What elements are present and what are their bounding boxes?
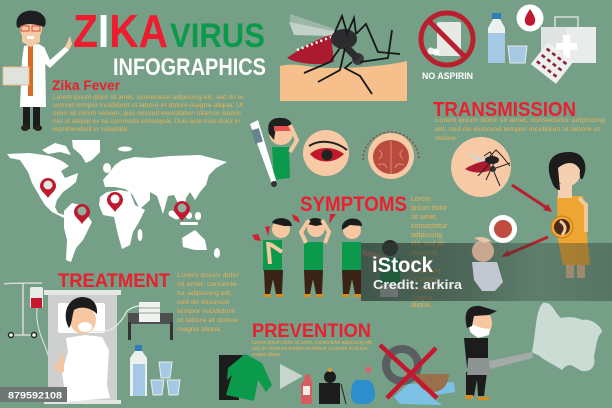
title: Zika Virus: VIRUS — [170, 17, 265, 55]
illustration: doctor — [3, 11, 72, 131]
icon: water bottle — [488, 13, 505, 63]
arrow: prevention items — [280, 364, 303, 389]
text block: Zika Fever: Lorem ipsum dolor sit amet, consectetur adipiscing elit, sed do ei- — [53, 94, 245, 101]
heading: Prevention: PREVENTION — [252, 320, 371, 342]
heading: Transmission: TRANSMISSION — [433, 99, 576, 121]
text block: Zika Fever: nisi ut aliquip ex ea commodo consequat. Duis aute irure dolor in — [53, 118, 240, 125]
icon: long pants and shirt — [219, 354, 272, 401]
illustration: symptom figures — [252, 214, 362, 297]
text block: Symptoms: Lorem — [411, 196, 431, 203]
text block: Prevention: Lorem ipsum dolor sit amet, consectetur adipiscing elit, — [252, 340, 373, 346]
text block: Symptoms: consectetur — [411, 223, 448, 230]
illustration: IV drip — [4, 283, 60, 358]
text block: Symptoms: elit, sed do — [411, 241, 445, 248]
text block: Treatment: sit amet, consecte- — [177, 281, 239, 288]
illustration: patient in bed — [44, 290, 140, 404]
icon: first aid kit — [541, 17, 596, 63]
text block: Transmission: dolore — [435, 135, 457, 142]
illustration: fog cloud — [532, 303, 602, 371]
text block: Treatment: tur adipiscing elit, — [177, 290, 232, 297]
illustration: man with fever — [268, 118, 297, 180]
text block: Treatment: tempor incididunt — [177, 308, 235, 315]
text block: Treatment: Lorem ipsum dolor — [177, 272, 240, 279]
text block: Transmission: Lorem ipsum dolor sit amet, consectetur adipiscing — [435, 117, 606, 124]
icon: trash bin — [319, 368, 346, 404]
arrow: mosquito to mother — [512, 185, 552, 212]
illustration: baby — [472, 237, 503, 291]
text block: Symptoms: incididunt — [411, 268, 441, 275]
text block: Symptoms: adipiscing — [411, 232, 442, 239]
icon: pill blister — [531, 42, 573, 84]
title: Zika Virus: ZIKA — [73, 5, 168, 57]
text block: Symptoms: magna — [411, 295, 433, 302]
text block: Transmission: elit, sed do eiusmod tempor incididunt ut labore et — [435, 126, 600, 133]
text block: Symptoms: ipsum dolor — [411, 205, 448, 212]
text block: Symptoms: aliqua. — [411, 302, 432, 309]
illustration: fourth symptom figure — [362, 240, 400, 297]
text block: Symptoms: ut labore — [411, 277, 438, 284]
text block: Symptoms: et dolore — [411, 286, 438, 293]
label: No Aspirin: NO ASPIRIN — [422, 71, 473, 81]
illustration: pregnant woman — [549, 152, 590, 278]
icon: water jar — [351, 366, 375, 404]
icon: blood drop — [516, 4, 544, 32]
watermark band — [361, 243, 612, 301]
text block: Symptoms: tempor — [411, 259, 433, 266]
text block: Symptoms: sit amet, — [411, 214, 438, 221]
heading: Zika Fever: Zika Fever — [52, 77, 121, 93]
subtitle: Infographics: INFOGRAPHICS — [113, 54, 266, 81]
text block: Treatment: magna aliqua. — [177, 326, 222, 333]
image id tag — [0, 387, 67, 402]
icon: repellent spray — [301, 374, 312, 404]
icon: red eye — [303, 130, 349, 176]
illustration: mosquito circle — [451, 137, 511, 197]
text block: Treatment: sed do eiusmod — [177, 299, 229, 306]
heading: Treatment: TREATMENT — [58, 270, 170, 292]
heading: Symptoms: SYMPTOMS — [300, 193, 407, 216]
text block: Zika Fever: usmod tempor incididunt ut labore et dolore magna aliqua. Ut — [53, 102, 243, 109]
text block: Symptoms: eiusmod — [411, 250, 438, 257]
illustration: medical monitor table — [128, 302, 173, 340]
icon: no aspirin — [421, 13, 473, 65]
illustration: man with fogger — [464, 306, 533, 400]
text block: Prevention: magna aliqua. — [252, 352, 281, 358]
illustration: thermometer — [250, 120, 277, 187]
illustration: mosquito on skin — [280, 14, 407, 101]
icon: crossed-out tire and bowl — [380, 345, 455, 405]
icon: small brain circle — [489, 215, 517, 243]
world map — [7, 140, 227, 262]
icon: brain — [363, 132, 419, 179]
image id number: 879592108 — [8, 390, 62, 402]
watermark credit: Credit: arkira — [373, 278, 463, 292]
icon: glass of water — [508, 46, 527, 63]
text block: Zika Fever: reprehenderit in voluptate. — [53, 126, 129, 133]
arrow: mother to baby — [501, 237, 548, 257]
title: Zika Virus — [73, 5, 265, 57]
watermark logo: iStock: iStock — [372, 254, 433, 277]
text block: Zika Fever: enim ad minim veniam, quis nostrud exercitation ullamco laboris — [53, 110, 241, 117]
text block: Treatment: ut labore et dolore — [177, 317, 238, 324]
icon: water bottle and glasses — [130, 345, 180, 396]
text block: Prevention: sed do eiusmod tempor incididunt ut labore et dolore — [252, 346, 368, 352]
